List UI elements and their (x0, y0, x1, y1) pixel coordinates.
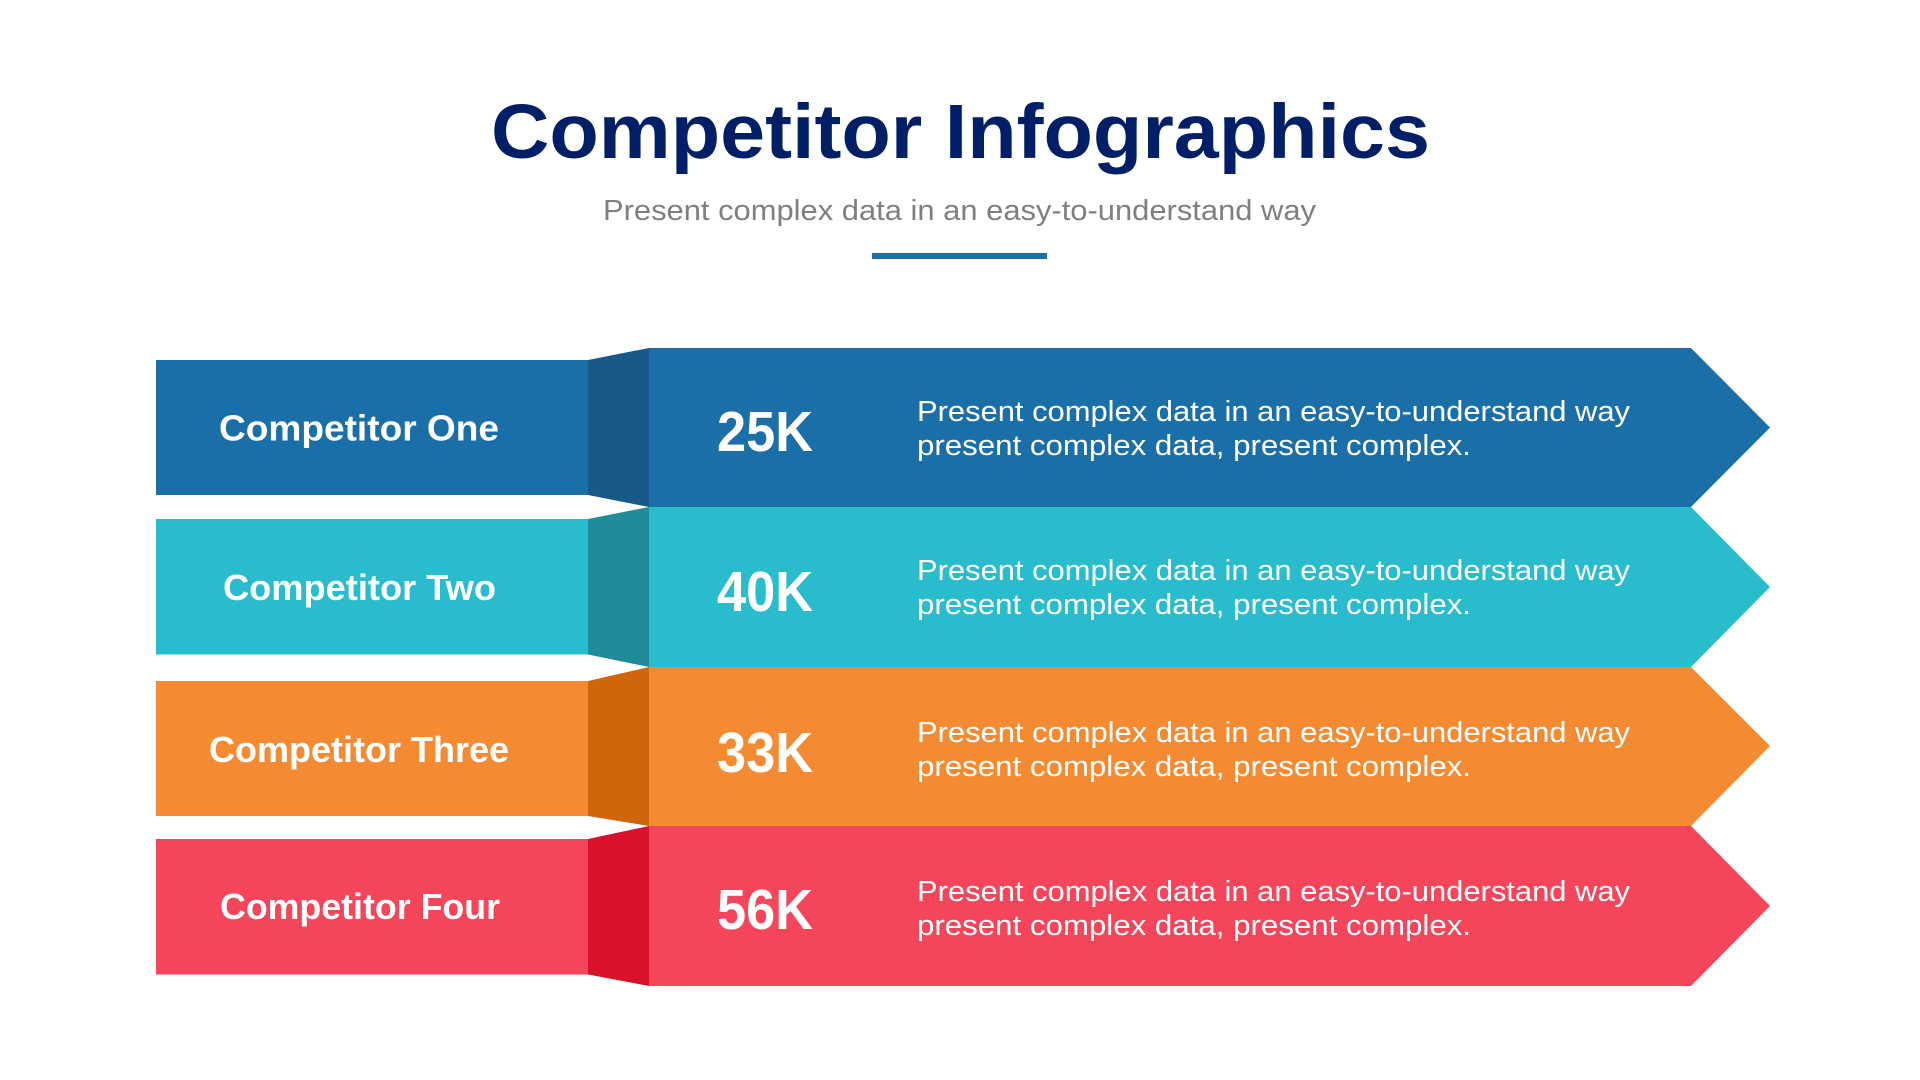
label two: Competitor Two (223, 567, 496, 608)
value four: 56K (717, 878, 813, 942)
description three: present complex data, present complex. (917, 751, 1471, 783)
title underline (872, 253, 1047, 259)
fold shade one (588, 348, 649, 507)
row: Competitor Two (156, 507, 1770, 667)
label four: Competitor Four (220, 886, 500, 927)
row: Competitor Three (156, 667, 1770, 826)
description three: Present complex data in an easy-to-understand way (917, 717, 1631, 749)
value two: 40K (717, 560, 813, 624)
label one: Competitor One (219, 408, 499, 448)
description one: Present complex data in an easy-to-understand way (917, 396, 1631, 428)
label bar two (156, 519, 588, 654)
value one: 25K (717, 400, 813, 464)
arrow two (649, 507, 1770, 667)
row: Competitor Four (156, 826, 1770, 986)
fold shade four (588, 826, 649, 986)
label bar one (156, 360, 588, 495)
description four: present complex data, present complex. (917, 910, 1471, 942)
value three: 33K (717, 721, 813, 785)
arrow three (649, 667, 1770, 826)
subtitle: Present complex data in an easy-to-understand way (603, 195, 1317, 227)
fold shade two (588, 507, 649, 667)
label three: Competitor Three (209, 729, 509, 770)
arrow one (649, 348, 1770, 507)
label bar four (156, 839, 588, 974)
description two: present complex data, present complex. (917, 589, 1471, 621)
description four: Present complex data in an easy-to-understand way (917, 876, 1631, 908)
fold shade three (588, 667, 649, 826)
row: Competitor One (156, 348, 1770, 507)
title: Competitor Infographics (491, 89, 1430, 175)
description one: present complex data, present complex. (917, 430, 1471, 462)
arrow four (649, 826, 1770, 986)
label bar three (156, 681, 588, 816)
description two: Present complex data in an easy-to-understand way (917, 555, 1631, 587)
